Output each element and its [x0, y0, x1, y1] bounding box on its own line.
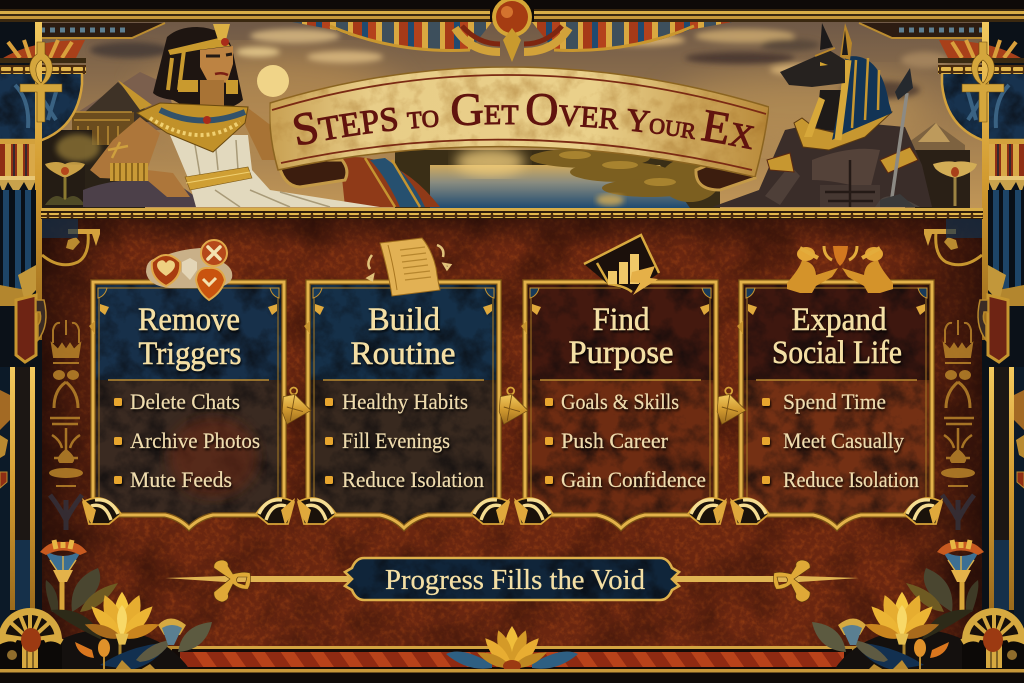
hieroglyphs left [50, 320, 82, 530]
callout: Progress Fills the Void: Progress Fills the Void [385, 564, 645, 596]
card 1 heading [138, 302, 242, 372]
card 2 list: Healthy Habits [342, 389, 468, 414]
card 4: Expand Social Life [730, 282, 943, 532]
arrow connector 2 [499, 387, 528, 424]
scroll curl right [696, 150, 755, 190]
arrow connector 1 [282, 387, 311, 424]
card 3 heading: Purpose [568, 335, 674, 371]
right pillar [924, 22, 1024, 670]
figure: Anubis [712, 23, 977, 207]
card 4 list: Reduce Isolation [783, 467, 919, 492]
scene: sky, landscape and river [40, 22, 984, 212]
scroll body [270, 67, 769, 177]
card 3 heading: Find [592, 302, 650, 338]
card 4 list: Meet Casually [783, 428, 904, 453]
icon: right ankh [962, 42, 1004, 122]
card 2 heading: Build [368, 302, 440, 338]
card 3 list: Goals & Skills [561, 389, 679, 414]
card 4 list: Spend Time [783, 389, 886, 414]
callout: Progress Fills the Void [345, 558, 679, 600]
bow right [773, 560, 810, 602]
progress rail right [674, 560, 859, 602]
plants bottom right [812, 540, 1024, 672]
title: STEPS TO GET OVER YOUR EX [294, 94, 754, 150]
arrow connector 3 [717, 387, 746, 424]
card 1 list [114, 389, 260, 492]
plants bottom left [0, 540, 212, 672]
top valance with central orb [292, 0, 732, 62]
card 2 list [325, 389, 484, 492]
card 1 list: Delete Chats [130, 389, 240, 414]
title banner [270, 66, 769, 192]
figure: Cleopatra [83, 24, 440, 207]
card 4 heading: Expand [792, 302, 887, 338]
icon: hearts and cross [146, 240, 232, 300]
top border band [0, 9, 1024, 38]
icon: bar chart with bolt [584, 235, 659, 295]
card 4 heading: Social Life [772, 335, 902, 371]
card 2: Build Routine [297, 282, 510, 532]
card 4 heading [772, 302, 902, 371]
icon: scroll [368, 238, 450, 296]
bottom border [0, 669, 1024, 683]
left pillar [0, 22, 100, 670]
icon: two figures with lotus [787, 246, 893, 293]
card 1: Remove Triggers [82, 282, 295, 532]
card 4 list [762, 389, 919, 492]
card 2 heading [350, 302, 456, 372]
bottom bar [167, 646, 857, 670]
card 2 list: Reduce Isolation [342, 467, 484, 492]
bow left [214, 560, 251, 602]
card 3 list [545, 389, 706, 492]
card 3 list: Gain Confidence [561, 467, 706, 492]
lotus ornament bottom centre [446, 626, 578, 673]
card 3 list: Push Career [561, 428, 669, 453]
divider frieze under scene [41, 208, 983, 219]
card 2 list: Fill Evenings [342, 428, 450, 453]
card 1 heading: Remove [138, 302, 240, 338]
card 2 heading: Routine [350, 336, 456, 372]
card 1 list: Archive Photos [130, 428, 260, 453]
hieroglyphs right [942, 320, 974, 530]
panel: main rust body [42, 218, 982, 670]
card 3: Find Purpose [514, 282, 727, 532]
scroll curl left [278, 160, 347, 187]
card 3 heading [568, 302, 674, 371]
progress rail left [165, 560, 350, 602]
card 1 heading: Triggers [138, 336, 242, 372]
card 1 list: Mute Feeds [130, 467, 232, 492]
icon: left ankh [20, 42, 62, 122]
